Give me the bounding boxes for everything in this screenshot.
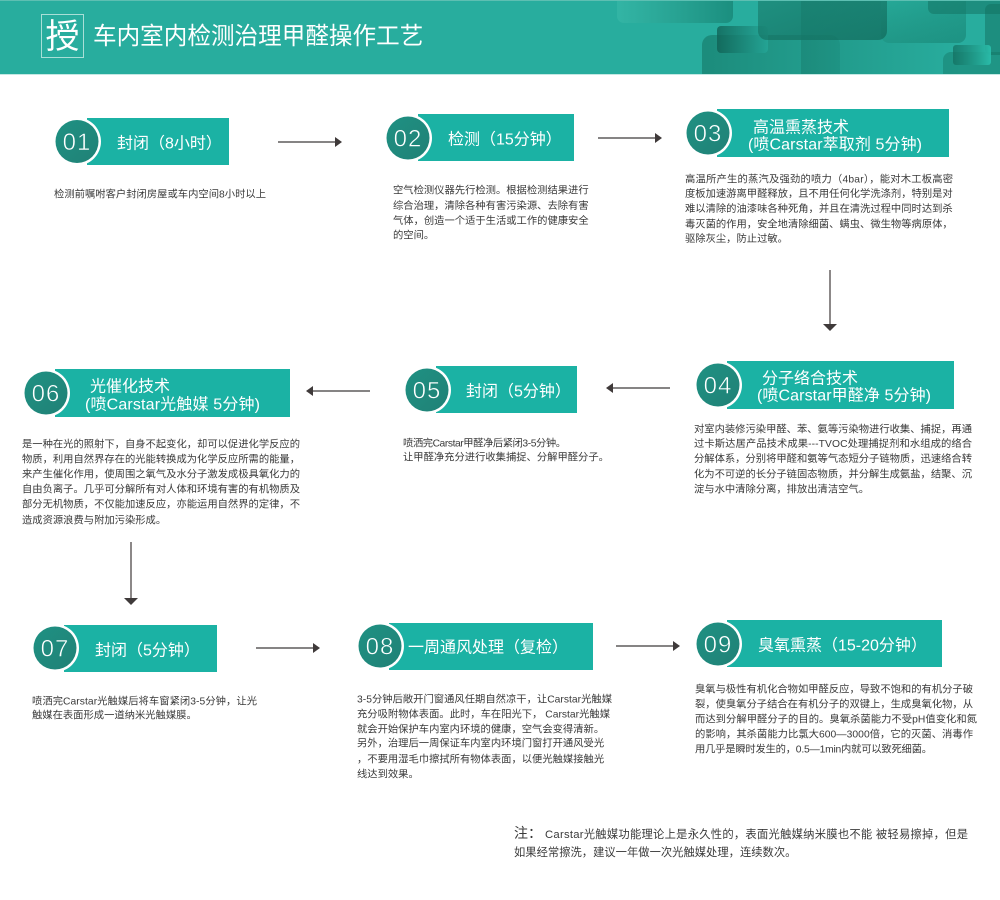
step 04 text: 淀与水中清除分离，排放出清洁空气。 <box>694 482 869 495</box>
footnote: 注： <box>514 825 542 841</box>
step 03 text <box>685 173 953 245</box>
step 04 text: 对室内装修污染甲醛、苯、氨等污染物进行收集、捕捉，再通 <box>694 423 972 436</box>
footnote: 如果经常擦洗，建议一年做一次光触媒处理，连续数次。 <box>514 845 796 859</box>
step 02 header <box>384 114 574 162</box>
step 08 text <box>357 693 612 781</box>
step 05 header: 封闭（5分钟） <box>466 382 571 400</box>
step 04 header: 分子络合技术 <box>762 368 858 388</box>
step 08 text: 就会开始保护车内室内环境的健康，空气会变得清新。 <box>357 723 604 736</box>
step 09 header: 臭氧熏蒸（15-20分钟） <box>758 636 927 654</box>
step 06 header: 06 <box>32 380 60 408</box>
step 09 text: 而达到分解甲醛分子的目的。臭氧杀菌能力不受pH值变化和氮 <box>695 713 977 726</box>
step 07 header: 07 <box>41 636 69 662</box>
step 08 header: 一周通风处理（复检） <box>408 638 568 656</box>
step 06 text: 部分无机物质，不仅能加速反应，亦能运用自然界的定律，不 <box>22 498 300 511</box>
step 03 text: 高温所产生的蒸汽及强劲的喷力（4bar），能对木工板高密 <box>685 173 953 186</box>
step 09 text <box>695 683 977 756</box>
step 01 <box>53 118 266 201</box>
step 07 text <box>32 695 257 722</box>
step 04 header: (喷Carstar甲醛净 5分钟) <box>757 386 931 404</box>
step 09 header <box>694 620 942 668</box>
step 05 text: 喷洒完Carstar甲醛净后紧闭3-5分钟。 <box>403 437 566 450</box>
step 05 header <box>403 366 577 414</box>
step 06 header <box>22 369 290 417</box>
step 09 header: 09 <box>704 632 732 658</box>
step 05 text: 让甲醛净充分进行收集捕捉、分解甲醛分子。 <box>403 451 609 464</box>
step 06 text: 造成资源浪费与附加污染形成。 <box>22 514 166 527</box>
step 06 text: 物质，利用自然界存在的光能转换成为化学反应所需的能量， <box>22 453 300 466</box>
step 02 text: 空气检测仪器先行检测。根据检测结果进行 <box>393 184 589 197</box>
step 07 header: 封闭（5分钟） <box>95 642 200 660</box>
arrow 04 to 05 <box>606 383 670 393</box>
step 03 text: 驱除灰尘，防止过敏。 <box>685 232 788 245</box>
step 08 header <box>356 622 593 670</box>
arrow 03 to 04 <box>823 270 837 331</box>
step 09 text: 的影响，其杀菌能力比氯大600—3000倍，它的灭菌、消毒作 <box>695 728 973 741</box>
arrow 07 to 08 <box>256 643 320 653</box>
step 02 text <box>393 184 589 242</box>
step 06 text <box>22 438 300 527</box>
step 02 header: 检测（15分钟） <box>448 130 562 148</box>
step 07 text: 喷洒完Carstar光触媒后将车窗紧闭3-5分钟，让光 <box>32 695 257 708</box>
step 06 text: 来产生催化作用，使周围之氧气及水分子激发成极具氧化力的 <box>22 468 300 481</box>
step 05 header: 05 <box>413 378 441 404</box>
step 09 text: 裂，使臭氧分子结合在有机分子的双键上，生成臭氧化物，从 <box>695 698 973 711</box>
step 09 <box>694 620 977 756</box>
title: 车内室内检测治理甲醛操作工艺 <box>93 23 423 50</box>
step 08 text: 线达到效果。 <box>357 768 419 781</box>
step 08 header: 08 <box>366 634 394 660</box>
step 07 header <box>31 624 217 672</box>
step 04 header <box>694 361 954 409</box>
step 03 header: (喷Carstar萃取剂 5分钟) <box>748 136 922 154</box>
step 03 header: 高温熏蒸技术 <box>753 118 849 136</box>
step 04 header: 04 <box>704 372 732 400</box>
step 06 header: (喷Carstar光触媒 5分钟) <box>85 396 260 414</box>
step 03 text: 难以清除的油漆味各种死角，并且在清洗过程中同时达到杀 <box>685 202 953 215</box>
arrow 06 to 07 <box>124 542 138 605</box>
arrow 08 to 09 <box>616 641 680 651</box>
step 05 <box>403 366 609 464</box>
step 07 <box>31 624 257 722</box>
step 02 text: 综合治理，清除各种有害污染源、去除有害 <box>393 199 589 212</box>
title badge: 授 <box>46 18 80 56</box>
step 05 text <box>403 437 609 464</box>
step 03 header <box>684 109 949 157</box>
step 04 text: 化为不可逆的长分子链固态物质，并分解生成氨盐，结聚、沉 <box>694 467 973 480</box>
step 02 text: 气体，创造一个适于生活或工作的健康安全 <box>393 214 589 227</box>
step 08 text: ，不要用湿毛巾擦拭所有物体表面，以便光触媒接触光 <box>357 753 604 766</box>
step 06 text: 自由负离子。几乎可分解所有对人体和环境有害的有机物质及 <box>22 483 300 496</box>
step 04 text: 过卡斯达居产品技术成果---TVOC处理捕捉剂和水组成的络合 <box>694 437 972 450</box>
step 01 header: 01 <box>63 129 91 156</box>
step 03 text: 毒灭菌的作用，安全地清除细菌、螨虫、微生物等病原体， <box>685 217 953 230</box>
step 01 header <box>53 118 229 166</box>
step 01 header: 封闭（8小时） <box>117 134 222 152</box>
step 07 text: 触媒在表面形成一道纳米光触媒膜。 <box>32 709 197 722</box>
step 08 text: 充分吸附物体表面。此时，车在阳光下， Carstar光触媒 <box>357 708 610 721</box>
step 06 header: 光催化技术 <box>90 378 170 396</box>
step 01 text: 检测前嘱咐客户封闭房屋或车内空间8小时以上 <box>54 188 266 201</box>
step 06 <box>22 369 300 527</box>
step 08 <box>356 622 612 781</box>
step 02 <box>384 114 589 242</box>
step 04 text: 分解体系，分别将甲醛和氨等气态短分子链物质，迅速络合转 <box>694 452 972 465</box>
header banner <box>0 0 1000 75</box>
arrow 01 to 02 <box>278 137 342 147</box>
step 04 <box>694 361 973 495</box>
arrow 02 to 03 <box>598 133 662 143</box>
step 03 <box>684 109 953 245</box>
step 08 text: 3-5分钟后敞开门窗通风任期自然凉干，让Carstar光触媒 <box>357 693 612 706</box>
step 03 text: 度板加速游离甲醛释放，且不用任何化学洗涤剂，特别是对 <box>685 187 953 200</box>
footnote: Carstar光触媒功能理论上是永久性的，表面光触媒纳米膜也不能 被轻易擦掉，但是 <box>545 827 968 841</box>
step 02 header: 02 <box>394 126 422 152</box>
footnote <box>514 825 968 859</box>
step 03 header: 03 <box>694 120 722 148</box>
step 06 text: 是一种在光的照射下，自身不起变化，却可以促进化学反应的 <box>22 438 300 451</box>
arrow 05 to 06 <box>306 386 370 396</box>
step 08 text: 另外，治理后一周保证车内室内环境门窗打开通风受光 <box>357 737 604 750</box>
step 09 text: 臭氧与极性有机化合物如甲醛反应，导致不饱和的有机分子破 <box>695 683 973 696</box>
step 04 text <box>694 423 973 495</box>
step 02 text: 的空间。 <box>393 229 434 242</box>
step 09 text: 用几乎是瞬时发生的，0.5—1min内就可以致死细菌。 <box>695 743 932 756</box>
